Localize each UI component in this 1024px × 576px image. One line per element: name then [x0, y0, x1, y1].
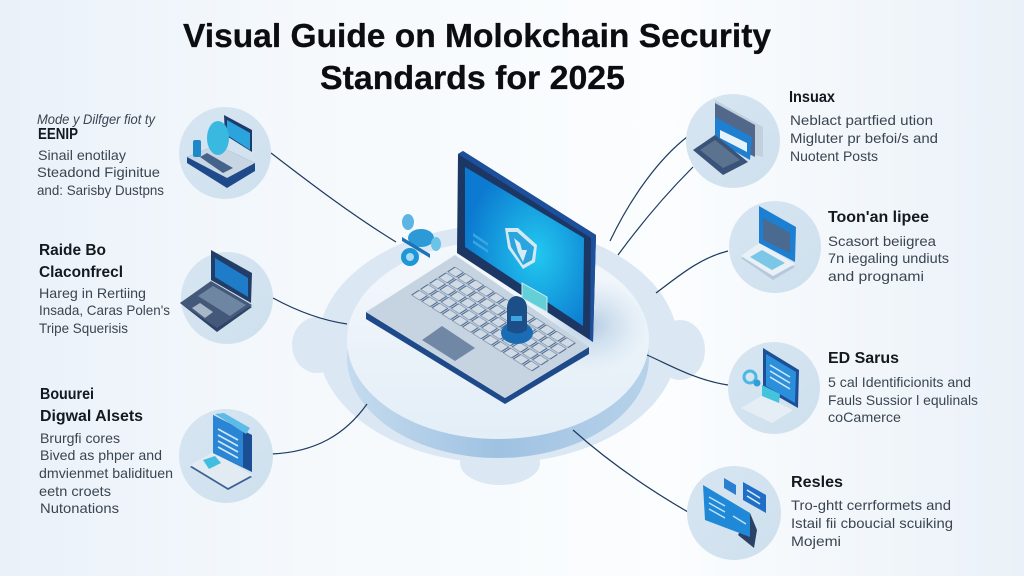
text block: Insuax — [789, 89, 835, 106]
keyboard — [410, 266, 577, 372]
panel: left item 1 — [37, 107, 271, 199]
text block — [789, 89, 938, 164]
connector lines — [271, 137, 728, 512]
text block: coCamerce — [828, 409, 901, 425]
text block — [37, 111, 164, 198]
text block: eetn croets — [39, 483, 111, 499]
text block: Tripe Squerisis — [39, 320, 128, 336]
text block: dmvienmet balidituen — [39, 465, 173, 481]
text block: Brurgfi cores — [40, 430, 120, 446]
text block: Hareg in Rertiing — [39, 285, 146, 301]
text block: Mode y Dilfger fiot ty — [37, 111, 156, 127]
text block — [828, 350, 978, 425]
text block: Raide Bo — [39, 242, 106, 259]
text block: Insada, Caras Polen's — [39, 302, 170, 318]
text block — [39, 242, 170, 336]
text block: Fauls Sussior l equlinals — [828, 392, 978, 408]
panel: left item 2 — [39, 242, 273, 344]
text block: Sinail enotilay — [38, 147, 126, 163]
text block: Steadond Figinitue — [37, 164, 160, 180]
floating person icon — [401, 214, 441, 266]
icon: laptop with shield — [179, 107, 271, 199]
panel: right item 3 — [728, 342, 978, 434]
text block: Nuotent Posts — [790, 148, 878, 164]
text block: and: Sarisby Dustpns — [37, 182, 164, 198]
laptop base — [366, 255, 589, 404]
shield icon — [505, 228, 537, 269]
text block: Toon'an lipee — [828, 209, 929, 226]
icon: laptop with window — [686, 94, 780, 188]
title — [183, 18, 771, 97]
text block: Nutonations — [40, 500, 119, 516]
panel: right item 1 — [686, 89, 938, 188]
text block: Neblact partfied ution — [790, 112, 933, 128]
laptop screen — [457, 151, 596, 342]
icon: floating screens — [687, 466, 781, 560]
text block — [791, 474, 953, 549]
text block: EENIP — [38, 126, 78, 143]
text block: 5 cal Identificionits and — [828, 374, 971, 390]
icon: dark laptop — [180, 250, 273, 344]
text block: and prognami — [828, 268, 924, 284]
panel: left item 3 — [39, 386, 273, 516]
icon: screen with ring — [728, 342, 820, 434]
text block: 7n iegaling undiuts — [828, 250, 949, 266]
text block: Bouurei — [40, 386, 94, 403]
text block: Mojemi — [791, 533, 841, 549]
text block — [828, 209, 949, 284]
text block: Tro-ghtt cerrformets and — [791, 497, 951, 513]
text block: Scasort beiigrea — [828, 233, 936, 249]
text block: ED Sarus — [828, 350, 899, 367]
title: Visual Guide on Molokchain Security — [183, 18, 771, 55]
text block: Resles — [791, 474, 843, 491]
icon: document folder — [179, 409, 273, 503]
text block: Claconfrecl — [39, 264, 123, 281]
lock figure on keyboard — [501, 283, 547, 344]
central platform — [292, 225, 705, 485]
text block: Digwal Alsets — [40, 408, 143, 425]
text block: Istail fii cboucial scuiking — [791, 515, 953, 531]
panel: right item 2 — [729, 201, 949, 293]
central laptop — [366, 151, 596, 404]
text block: Migluter pr befoi/s and — [790, 130, 938, 146]
title: Standards for 2025 — [320, 60, 625, 97]
icon: blue laptop — [729, 201, 821, 293]
panel: right item 4 — [687, 466, 953, 560]
text block: Bived as phper and — [40, 447, 162, 463]
text block — [39, 386, 173, 516]
